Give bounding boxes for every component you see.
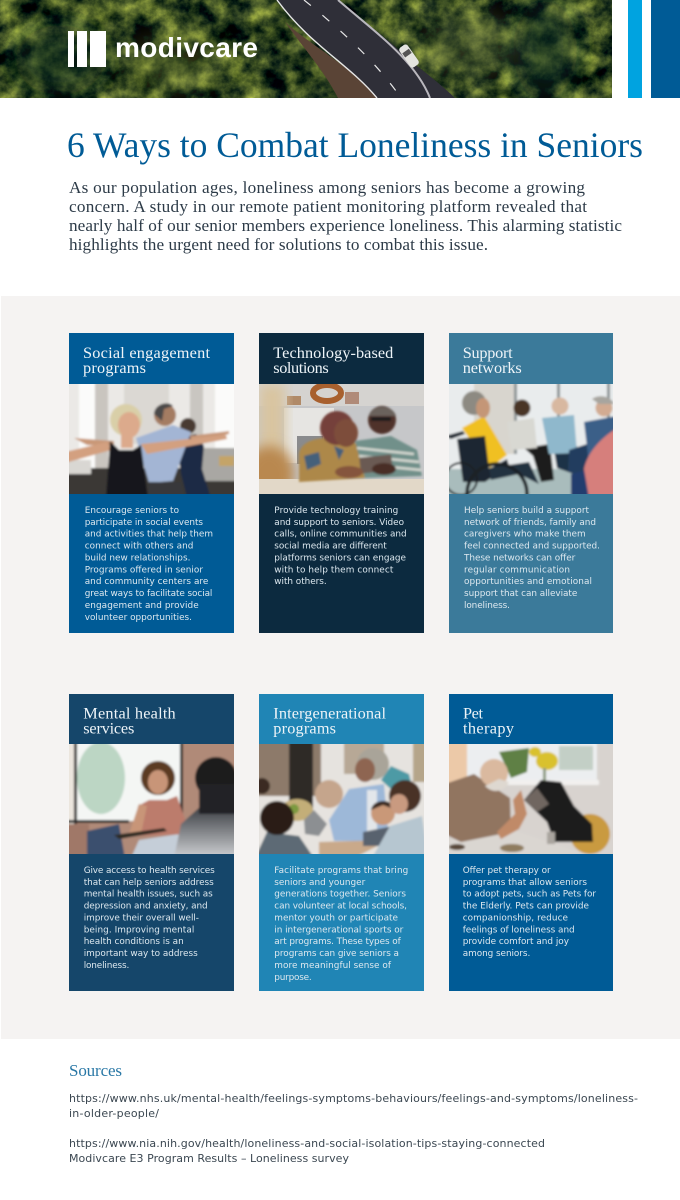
body text: improve their overall well- xyxy=(84,914,199,924)
body text xyxy=(274,866,408,983)
body text: with others. xyxy=(274,577,327,587)
body text: health conditions is an xyxy=(84,937,184,947)
body text: Provide technology training xyxy=(274,506,398,516)
body text: mental health issues, such as xyxy=(84,890,213,900)
body text: can volunteer at local schools, xyxy=(274,902,407,912)
intro paragraph: nearly half of our senior members experience loneliness. This alarming statistic xyxy=(69,216,622,235)
body text: generations together. Seniors xyxy=(274,890,406,900)
photo: seniors doing yoga xyxy=(69,384,234,494)
intro paragraph: concern. A study in our remote patient monitoring platform revealed that xyxy=(69,197,587,216)
body text: participate in social events xyxy=(85,518,203,528)
card heading: Mental health xyxy=(83,704,176,722)
card: pet therapy xyxy=(445,694,617,991)
body text xyxy=(274,506,407,587)
body text: and support to seniors. Video xyxy=(274,518,404,528)
body text: connect with others and xyxy=(85,542,193,552)
body text: social media are different xyxy=(274,542,387,552)
card: support networks xyxy=(445,333,617,633)
body text: among seniors. xyxy=(463,949,530,959)
photo: couple using a tablet xyxy=(259,384,424,494)
card heading: services xyxy=(83,718,134,738)
body text xyxy=(85,506,213,623)
body text: volunteer opportunities. xyxy=(85,613,192,623)
card: intergenerational programs xyxy=(254,694,428,991)
body text: platforms seniors can engage xyxy=(274,554,406,564)
sources list: Modivcare E3 Program Results – Loneliness survey xyxy=(69,1152,349,1165)
card: mental health services xyxy=(65,694,238,991)
card heading: solutions xyxy=(273,358,329,377)
body text: engagement and provide xyxy=(85,601,199,611)
card heading: Social engagement xyxy=(83,343,210,362)
body text: regular communication xyxy=(464,565,570,575)
body text: support that can alleviate xyxy=(464,589,577,599)
body text: art programs. These types of xyxy=(274,937,402,947)
body text: Offer pet therapy or xyxy=(463,866,551,876)
body text xyxy=(84,866,215,971)
card heading: networks xyxy=(463,358,522,377)
body text: programs that allow seniors xyxy=(463,878,587,888)
panel: six ways background xyxy=(1,296,680,1039)
body text: feelings of loneliness and xyxy=(463,925,575,935)
body text: Encourage seniors to xyxy=(85,506,179,516)
logo: modivcare xyxy=(68,31,258,67)
sources heading: Sources xyxy=(69,1061,122,1080)
body text: provide comfort and joy xyxy=(463,937,569,947)
photo: seniors and children sharing food xyxy=(259,744,424,854)
body text: and community centers are xyxy=(85,577,208,587)
header banner photo: aerial forest road xyxy=(0,0,612,100)
card: social engagement programs xyxy=(65,333,238,633)
sources list: in-older-people/ xyxy=(69,1107,159,1120)
body text: network of friends, family and xyxy=(464,518,596,528)
card heading: Pet xyxy=(463,704,483,722)
sources list xyxy=(69,1092,638,1165)
body text xyxy=(463,506,600,611)
card heading: programs xyxy=(273,718,336,738)
photo: senior man high-fiving a dog xyxy=(449,744,613,854)
card heading: Support xyxy=(463,343,513,362)
body text xyxy=(463,866,596,959)
card heading: therapy xyxy=(463,718,515,738)
body text: feel connected and supported. xyxy=(464,542,600,552)
body text: caregivers who make them xyxy=(464,530,586,540)
body text: loneliness. xyxy=(464,601,510,611)
intro paragraph: As our population ages, loneliness among seniors has become a growing xyxy=(69,178,585,197)
photo: counsellor in conversation xyxy=(69,744,234,854)
body text: great ways to facilitate social xyxy=(85,589,212,599)
card heading xyxy=(463,704,515,738)
body text: opportunities and emotional xyxy=(464,577,592,587)
body text: build new relationships. xyxy=(85,554,190,564)
body text: Give access to health services xyxy=(84,866,215,876)
body text: loneliness. xyxy=(84,961,129,971)
sources list: https://www.nia.nih.gov/health/loneliness-and-social-isolation-tips-staying-connected xyxy=(69,1137,545,1150)
card heading xyxy=(273,704,386,738)
sources list: https://www.nhs.uk/mental-health/feelings-symptoms-behaviours/feelings-and-symptoms/loneliness- xyxy=(69,1092,638,1105)
card heading xyxy=(273,343,393,377)
body text: depression and anxiety, and xyxy=(84,902,208,912)
body text: companionship, reduce xyxy=(463,914,568,924)
photo: seniors support group xyxy=(449,384,613,494)
decorative brand bars xyxy=(628,0,680,98)
logo: modivcare: modivcare xyxy=(115,32,258,63)
body text: and activities that help them xyxy=(85,530,213,540)
body text: in intergenerational sports or xyxy=(274,925,404,935)
title: 6 Ways to Combat Loneliness in Seniors xyxy=(67,125,643,165)
intro paragraph xyxy=(69,178,622,254)
card: technology-based solutions xyxy=(244,333,424,633)
card heading xyxy=(83,704,176,738)
card heading: programs xyxy=(83,358,146,377)
body text: programs can give seniors a xyxy=(274,949,399,959)
body text: calls, online communities and xyxy=(274,530,407,540)
body text: seniors and younger xyxy=(274,878,366,888)
body text: more meaningful sense of xyxy=(274,961,392,971)
body text: being. Improving mental xyxy=(84,925,194,935)
body text: that can help seniors address xyxy=(84,878,214,888)
body text: purpose. xyxy=(274,973,312,983)
body text: These networks can offer xyxy=(463,554,576,564)
card heading: Technology-based xyxy=(273,343,393,362)
card heading: Intergenerational xyxy=(273,704,386,722)
body text: Facilitate programs that bring xyxy=(274,866,408,876)
intro paragraph: highlights the urgent need for solutions to combat this issue. xyxy=(69,235,488,254)
card heading xyxy=(463,343,522,377)
body text: Help seniors build a support xyxy=(464,506,590,516)
body text: the Elderly. Pets can provide xyxy=(463,902,589,912)
body text: to adopt pets, such as Pets for xyxy=(463,890,596,900)
body text: mentor youth or participate xyxy=(274,914,398,924)
body text: important way to address xyxy=(84,949,198,959)
body text: Programs offered in senior xyxy=(85,565,203,575)
card heading xyxy=(83,343,210,377)
body text: with to help them connect xyxy=(274,565,394,575)
